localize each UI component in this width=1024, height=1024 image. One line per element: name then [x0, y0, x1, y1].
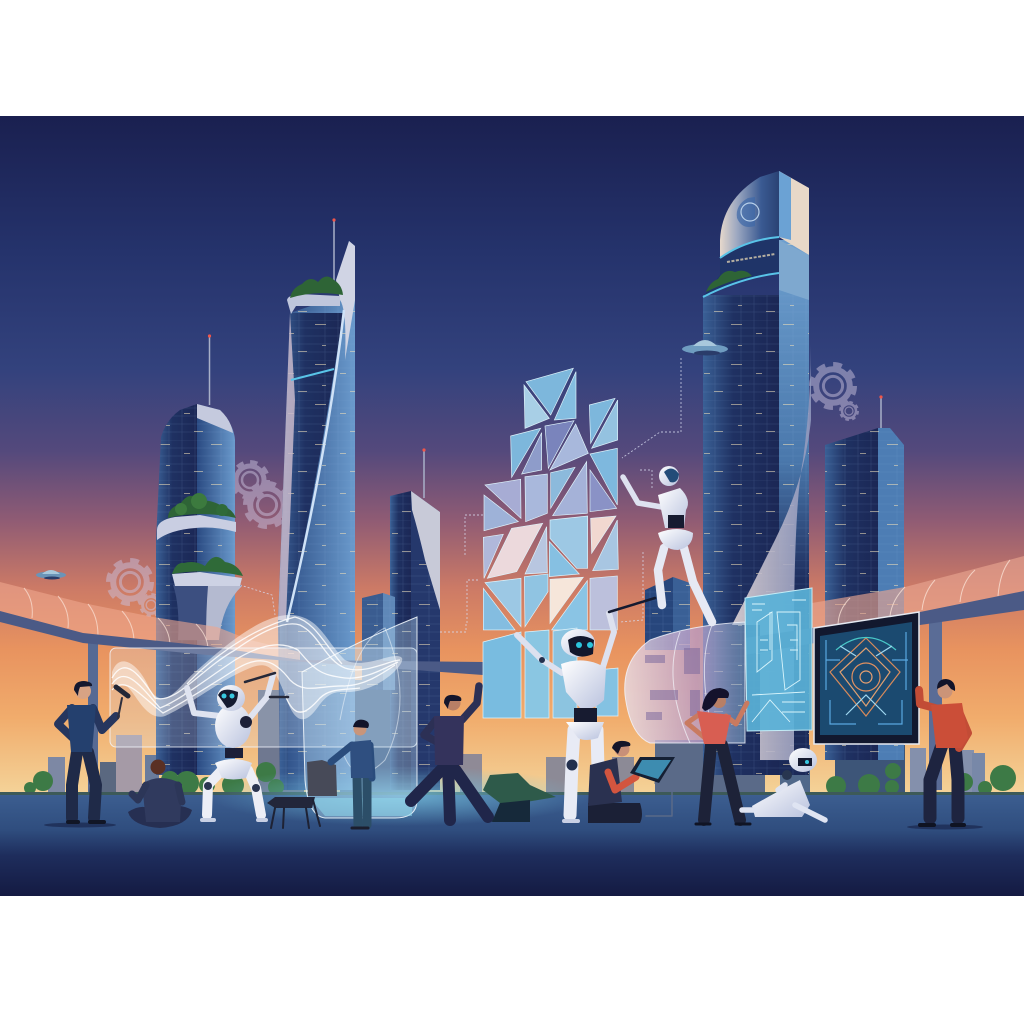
antenna — [332, 218, 336, 282]
head — [659, 466, 679, 486]
brush — [245, 673, 288, 697]
figure: man with roller — [44, 681, 128, 828]
ground plane — [0, 795, 1024, 896]
head — [217, 685, 245, 711]
foot — [564, 819, 578, 823]
tower: small block behind robot — [645, 577, 690, 650]
robot: upper painting panels — [623, 466, 712, 622]
translucent frame panel — [110, 617, 417, 818]
paint roller — [118, 698, 122, 718]
arms — [132, 785, 182, 802]
head — [150, 760, 166, 774]
head — [354, 722, 366, 736]
tower: mid block — [390, 448, 440, 790]
tower body — [156, 404, 235, 775]
green folded machine — [483, 773, 556, 822]
tower: left with sky gardens — [156, 334, 243, 775]
rooftop garden — [287, 276, 343, 314]
head — [446, 696, 460, 710]
glass tube — [0, 582, 300, 660]
mid-ground trees — [0, 762, 1024, 796]
translucent curved roll hologram — [625, 622, 745, 743]
floor shadow — [44, 822, 116, 828]
torso — [561, 660, 606, 709]
joints — [204, 782, 212, 790]
legs — [704, 745, 740, 820]
torso — [697, 711, 731, 744]
arm — [608, 772, 636, 790]
arms — [58, 708, 116, 742]
bridge: left — [0, 582, 483, 793]
pillar — [929, 620, 942, 790]
body — [267, 797, 315, 808]
tablet — [630, 757, 675, 783]
roll map blocks — [645, 648, 700, 720]
torso — [215, 704, 251, 748]
tower: right tall — [703, 171, 811, 775]
deck — [745, 591, 1024, 655]
head — [614, 742, 630, 756]
arm — [623, 477, 662, 507]
legs — [271, 800, 320, 828]
translucent curved sheet — [302, 617, 417, 818]
bridge: right — [745, 556, 1024, 790]
antenna — [208, 334, 211, 405]
legs — [357, 776, 367, 825]
tower lower body — [703, 240, 809, 775]
antenna — [879, 395, 883, 430]
quadruped machine with cloak — [267, 760, 337, 828]
limbs — [742, 785, 825, 820]
arms — [424, 686, 479, 745]
sweeping sail — [732, 345, 811, 760]
arms — [187, 675, 273, 720]
tube ribs — [24, 588, 208, 650]
figure: seated person — [128, 760, 192, 828]
large screen — [814, 612, 919, 744]
arms — [517, 613, 614, 673]
flying saucer right — [682, 340, 728, 356]
torso — [142, 778, 182, 822]
shoes — [920, 823, 964, 827]
blueprint panel — [745, 588, 812, 731]
shadow — [907, 824, 983, 830]
tower: small block — [362, 593, 395, 690]
shoes — [352, 826, 368, 830]
figure: striding person — [411, 686, 488, 820]
background: sky panel — [0, 116, 1024, 896]
tower body — [825, 428, 904, 760]
flowing wave ribbon — [112, 615, 402, 719]
lower mosaic row — [483, 628, 618, 718]
tower: far right — [825, 395, 904, 760]
legs — [207, 770, 261, 815]
torso — [658, 488, 688, 528]
circuit design — [826, 632, 908, 724]
gears behind towers — [110, 366, 858, 615]
tablet stand — [646, 783, 672, 816]
terrace two with funnel — [172, 557, 243, 640]
figure: person in blue — [331, 720, 373, 828]
robot: crouching small — [742, 748, 825, 820]
terrace one — [157, 493, 236, 540]
extended brush — [609, 598, 655, 612]
deck — [0, 611, 483, 675]
figure: man in red — [907, 679, 983, 830]
cloak — [307, 760, 337, 796]
head and hair — [712, 694, 726, 708]
crossed legs — [128, 806, 192, 828]
arms — [919, 690, 968, 748]
legs — [658, 548, 712, 622]
robot: painting wave — [187, 673, 288, 820]
feet — [202, 818, 266, 822]
robot: centre reaching — [517, 598, 655, 821]
head — [75, 683, 91, 699]
torso — [434, 716, 464, 765]
shoes — [696, 822, 750, 826]
torso — [350, 740, 373, 778]
torso vest — [588, 758, 622, 806]
distant skyline — [48, 680, 985, 795]
circuit dotted connectors — [240, 358, 681, 632]
crown — [703, 171, 809, 300]
antenna — [422, 448, 426, 498]
shoes — [68, 820, 104, 824]
flying saucer left — [36, 570, 66, 580]
pillar — [88, 638, 98, 793]
floor glow — [210, 766, 590, 826]
holographic mosaic panels — [483, 368, 618, 718]
head — [938, 684, 952, 698]
tower body — [278, 241, 355, 790]
tower body — [390, 491, 440, 790]
figure: woman in coral — [687, 688, 750, 824]
legs — [570, 730, 598, 815]
head — [789, 748, 817, 772]
glass tube — [812, 556, 1024, 632]
joint — [782, 770, 792, 780]
body — [752, 780, 810, 817]
arms — [687, 703, 747, 738]
figure: kneeling person with tablet — [588, 741, 675, 823]
torso — [67, 705, 96, 752]
legs — [588, 803, 642, 823]
tube ribs — [838, 560, 1010, 626]
head — [561, 629, 595, 657]
legs — [411, 765, 488, 820]
joints — [566, 760, 578, 770]
torso — [931, 703, 968, 748]
legs — [930, 745, 958, 818]
tower: tall twisted — [278, 218, 355, 790]
legs — [72, 752, 96, 818]
arms — [331, 745, 372, 778]
